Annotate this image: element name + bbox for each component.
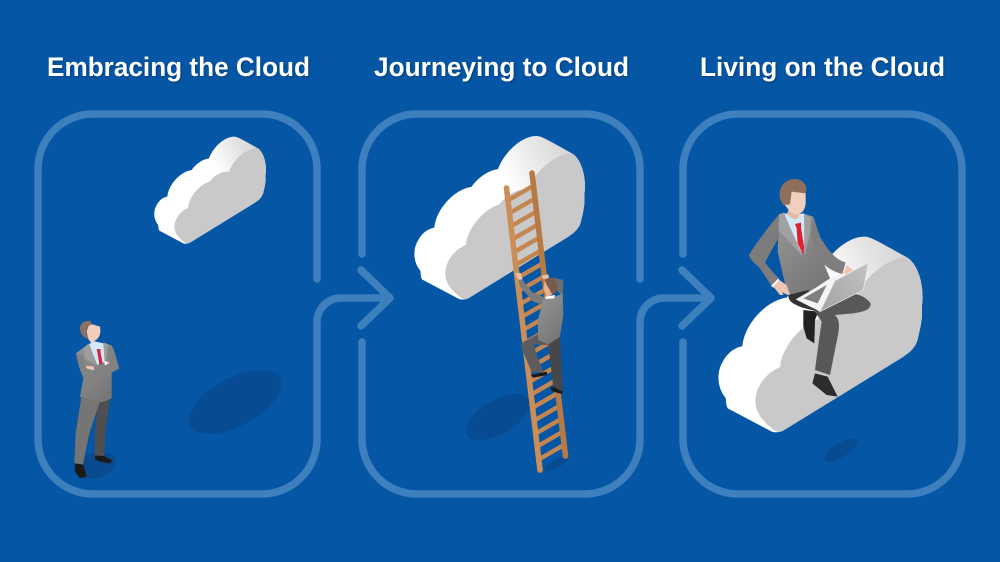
heading: Journeying to Cloud: Journeying to Cloud — [374, 52, 629, 82]
panel 1 outline with arrow — [38, 114, 390, 494]
shadow of climber — [458, 384, 538, 450]
shadow of cloud — [179, 357, 291, 447]
panel: embracing the cloud — [38, 114, 390, 494]
heading: Embracing the Cloud: Embracing the Cloud — [47, 52, 310, 82]
icon: wooden ladder — [506, 173, 566, 470]
figure: man looking up with arms crossed — [71, 321, 119, 483]
panel 2 outline with arrow — [362, 114, 711, 494]
trousers, shoes and laptop — [788, 263, 871, 397]
shadow of ladder — [542, 454, 570, 474]
panel 3 outline — [683, 114, 962, 494]
legs and shoes — [71, 395, 119, 483]
figure: man climbing ladder — [515, 273, 563, 394]
upper body — [749, 179, 854, 302]
icon: largest cloud — [718, 237, 923, 432]
heading: Living on the Cloud: Living on the Cloud — [700, 52, 945, 82]
panel: journeying to cloud — [362, 114, 711, 494]
figure: man sitting on cloud with laptop — [749, 179, 871, 397]
panel: living on the cloud — [683, 114, 962, 494]
icon: large cloud — [414, 136, 585, 300]
upper body — [76, 321, 119, 402]
shadow of cloud and man — [821, 434, 861, 466]
icon: small cloud — [154, 137, 266, 244]
